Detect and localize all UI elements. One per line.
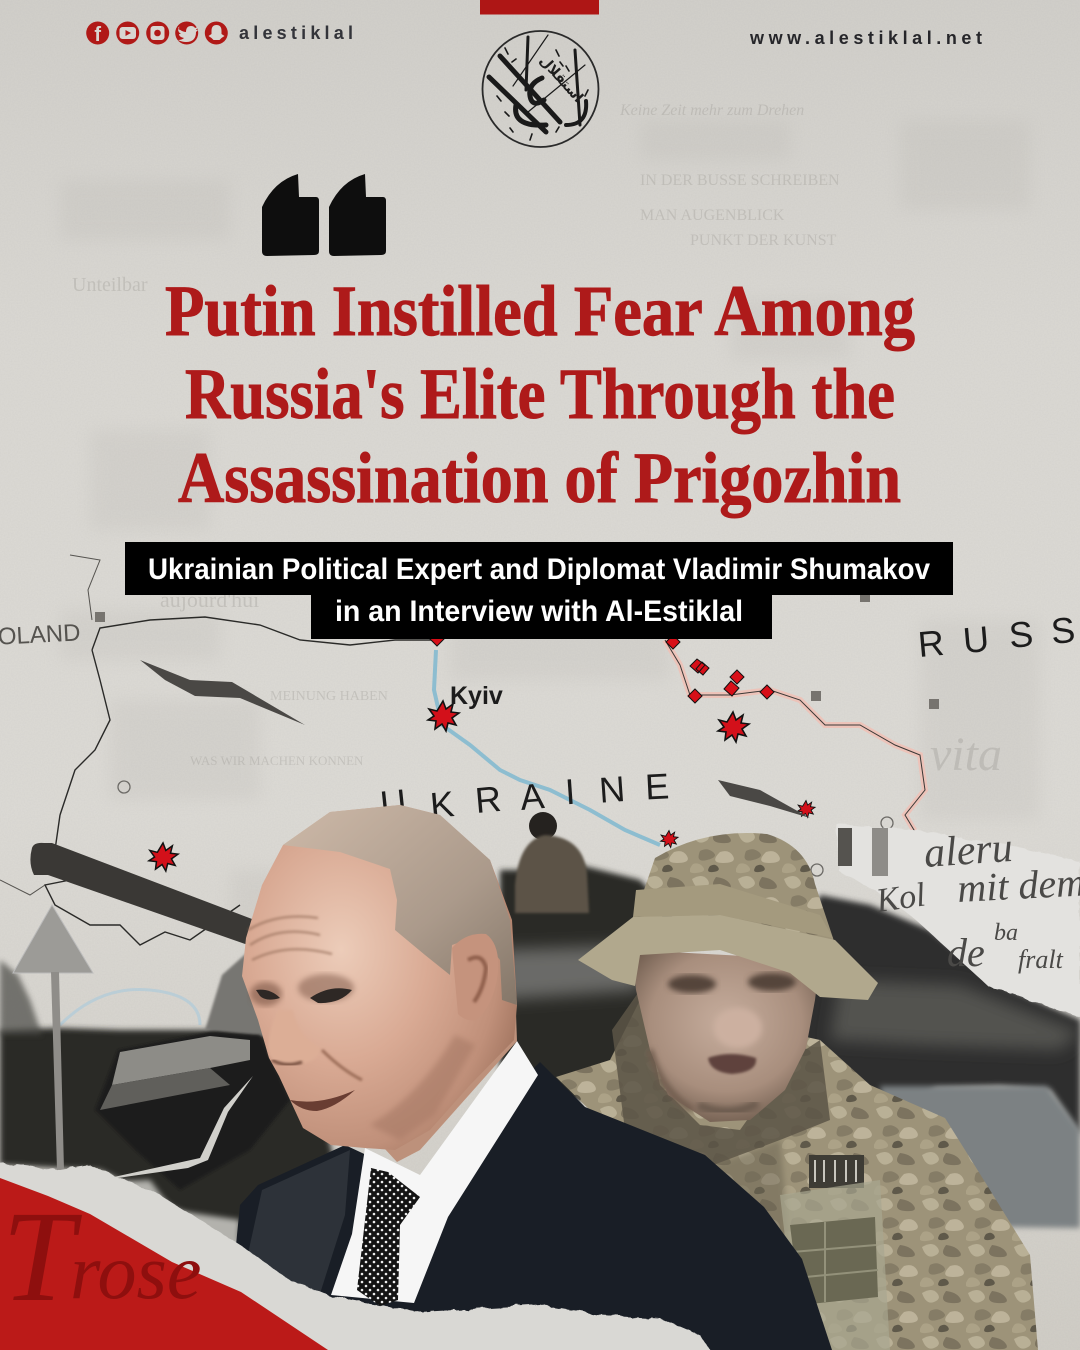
map circles [118, 781, 893, 876]
icon: quotation mark [262, 174, 386, 256]
map labels: K [428, 783, 456, 826]
road sign [13, 905, 93, 1170]
faint collage texture: IN DER BUSSE SCHREIBEN [640, 172, 840, 189]
torn paper with handwriting: Kol [873, 876, 928, 920]
map labels: I [564, 771, 577, 812]
torn paper strip, bottom [0, 1163, 730, 1350]
faint collage texture: aujourd'hui [160, 587, 259, 612]
brow wrinkles [248, 916, 332, 960]
shirt [331, 1041, 538, 1303]
red diamond markers [430, 632, 774, 703]
wet road [880, 1086, 1080, 1228]
map labels: E [644, 765, 670, 808]
eyes [250, 974, 354, 1006]
map labels: S [1007, 613, 1035, 656]
torn paper with handwriting: fralt [1018, 945, 1064, 974]
map labels [0, 609, 1077, 826]
map of Ukraine [0, 555, 1077, 1025]
face [632, 950, 820, 1122]
faint collage texture: vita [930, 728, 1002, 781]
social media icons [86, 22, 228, 46]
subtitle: in an Interview with Al-Estiklal [335, 595, 743, 628]
right tank [780, 895, 1080, 1135]
faint collage texture: MAN AUGENBLICK [640, 207, 785, 224]
title: Russia's Elite Through the [185, 354, 895, 434]
icon: youtube [116, 22, 139, 44]
inner ear shadow [468, 957, 486, 1002]
map border [45, 617, 435, 945]
map labels: R [473, 778, 503, 821]
red torn corner [0, 1178, 328, 1350]
map labels: A [518, 775, 546, 818]
handwriting on red: T [2, 1185, 82, 1329]
river Dnipro [434, 650, 660, 845]
map labels: Kyiv [450, 682, 503, 710]
map labels: U [378, 781, 408, 824]
nasolabial fold [322, 1050, 362, 1080]
left tank hull [95, 1032, 290, 1190]
logo: Al-Estiklal calligraphy seal [482, 31, 598, 147]
chest strap [809, 1155, 864, 1188]
head [242, 805, 517, 1150]
handwriting on red: rose [70, 1228, 201, 1315]
icon: facebook: f [94, 24, 101, 46]
top red tab [480, 0, 599, 14]
neck [372, 985, 517, 1162]
title [165, 271, 915, 518]
tank gun barrel [30, 843, 252, 945]
handwriting on red [2, 1185, 201, 1329]
jacket [556, 1000, 1038, 1350]
faint collage texture: Keine Zeit mehr zum Drehen [619, 102, 804, 119]
website url: www.alestiklal.net [749, 28, 982, 48]
faint collage texture: MEINUNG HABEN [270, 689, 388, 704]
dry bushes [0, 960, 42, 1035]
chest shadow [600, 1120, 800, 1350]
lower road patch [96, 1180, 240, 1292]
title: Putin Instilled Fear Among [165, 271, 915, 351]
tie [357, 1168, 420, 1306]
icon: facebook [86, 22, 109, 46]
torn paper scraps on map [140, 660, 305, 725]
explosion markers [149, 701, 815, 871]
icon: twitter [175, 22, 198, 44]
tank battle photo [0, 812, 1080, 1292]
map labels: N [598, 768, 627, 811]
water spot [60, 989, 200, 1025]
jaw shadow [370, 1035, 475, 1140]
mouth [290, 1090, 355, 1111]
soldier [515, 812, 589, 913]
torn paper with handwriting [836, 824, 1080, 1017]
scarf [612, 990, 830, 1170]
subtitle [125, 542, 953, 639]
subtitle: Ukrainian Political Expert and Diplomat Vladimir Shumakov [148, 553, 930, 586]
nose [268, 1010, 321, 1064]
map labels: U [961, 618, 991, 661]
faint collage texture: Unteilbar [72, 274, 148, 296]
hat [578, 833, 878, 1000]
ear [452, 934, 498, 1020]
faint collage texture: PUNKT DER KUNST [690, 232, 837, 249]
centre tank [500, 860, 660, 1100]
left tank turret [205, 950, 290, 1040]
hair [283, 805, 517, 1005]
portrait: Prigozhin [556, 833, 1038, 1350]
torn paper with handwriting: ba [994, 920, 1018, 946]
chest plate [780, 1180, 890, 1350]
torn paper with handwriting: de [947, 930, 985, 975]
map labels: R [916, 622, 946, 665]
dark ground left [0, 1000, 350, 1240]
faint collage texture: WAS WIR MACHEN KONNEN [190, 753, 364, 768]
torn white streak [96, 1076, 253, 1181]
brand handle: alestiklal [239, 23, 353, 43]
map labels: S [1049, 609, 1077, 652]
logo: Al-Estiklal calligraphy seal: استقلال [536, 53, 586, 106]
eastern border [665, 640, 925, 840]
portrait: Putin [232, 805, 832, 1350]
title: Assassination of Prigozhin [178, 438, 901, 518]
neighbouring borders [0, 555, 100, 895]
city squares [95, 592, 939, 709]
torn paper with handwriting: aleru [922, 825, 1014, 877]
icon: instagram [146, 22, 169, 44]
icon: snapchat [205, 22, 228, 44]
suit [232, 1062, 832, 1350]
